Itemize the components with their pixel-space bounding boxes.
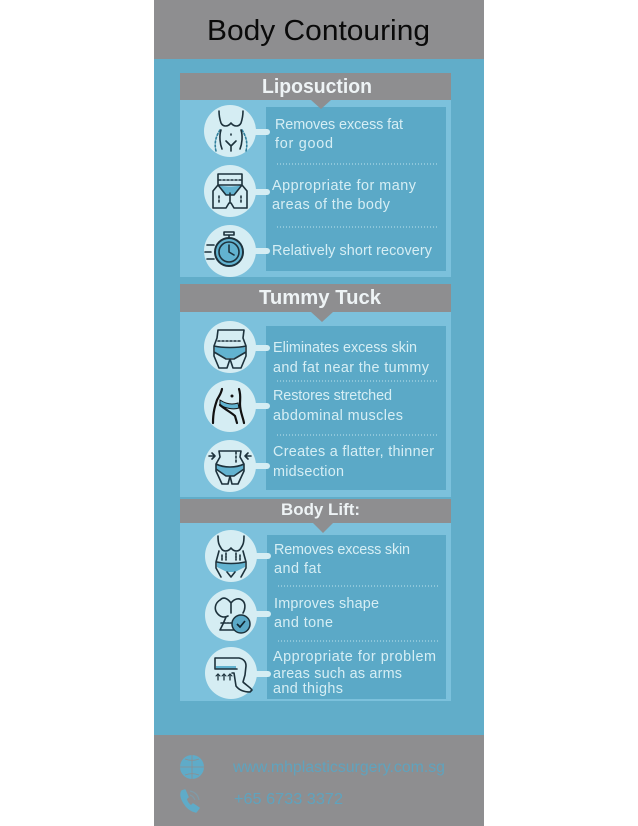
item: relatively short recovery: Relatively short recovery xyxy=(272,243,433,259)
item: appropriate for problem areas: and thighs xyxy=(273,681,343,697)
title banner: Body Contouring xyxy=(207,15,430,47)
item: appropriate for many areas: Appropriate for many xyxy=(272,178,417,194)
item: improves shape and tone xyxy=(205,589,379,641)
heading: tummy tuck xyxy=(180,284,451,322)
icon: phone xyxy=(181,790,199,812)
item: appropriate for many areas xyxy=(204,165,417,217)
item: removes excess skin and fat: Removes excess skin xyxy=(274,542,410,558)
panel: liposuction xyxy=(180,73,451,277)
item: removes excess fat xyxy=(204,105,403,157)
heading: body lift: Body Lift: xyxy=(281,500,360,519)
panel: body lift xyxy=(180,499,451,701)
item: creates a flatter midsection: midsection xyxy=(273,464,344,480)
website link: www.mhplasticsurgery.com.sg xyxy=(232,759,445,776)
item: eliminates excess skin xyxy=(204,321,430,376)
main blue background xyxy=(154,59,484,735)
heading: tummy tuck: Tummy Tuck xyxy=(259,287,382,309)
item: improves shape and tone: Improves shape xyxy=(274,596,379,612)
item: eliminates excess skin: and fat near the tummy xyxy=(273,360,430,376)
item: improves shape and tone: and tone xyxy=(274,615,333,631)
item: removes excess fat: Removes excess fat xyxy=(275,117,403,133)
item: creates a flatter midsection: Creates a flatter, thinner xyxy=(273,444,434,460)
item: appropriate for problem areas: Appropriate for problem xyxy=(273,649,436,665)
heading: body lift xyxy=(180,499,451,533)
item: removes excess skin and fat: and fat xyxy=(274,561,321,577)
heading: liposuction: Liposuction xyxy=(262,76,372,98)
item: restores abdominal muscles: abdominal muscles xyxy=(273,408,403,424)
item: relatively short recovery xyxy=(204,225,433,277)
item: appropriate for problem areas xyxy=(205,647,436,699)
item: removes excess fat: for good xyxy=(275,136,333,152)
item: removes excess skin and fat xyxy=(205,530,410,582)
heading: liposuction xyxy=(180,73,451,109)
icon: globe xyxy=(180,755,204,779)
phone number: +65 6733 3372 xyxy=(234,791,343,808)
item: restores abdominal muscles xyxy=(204,380,403,432)
panel: tummy tuck xyxy=(180,284,451,497)
footer contact band xyxy=(154,735,484,826)
item: appropriate for many areas: areas of the body xyxy=(272,197,391,213)
item: creates a flatter midsection xyxy=(204,440,434,492)
item: appropriate for problem areas: areas such as arms xyxy=(273,666,402,682)
title banner xyxy=(154,0,484,59)
item: restores abdominal muscles: Restores stretched xyxy=(273,388,392,404)
item: eliminates excess skin: Eliminates excess skin xyxy=(273,340,417,356)
